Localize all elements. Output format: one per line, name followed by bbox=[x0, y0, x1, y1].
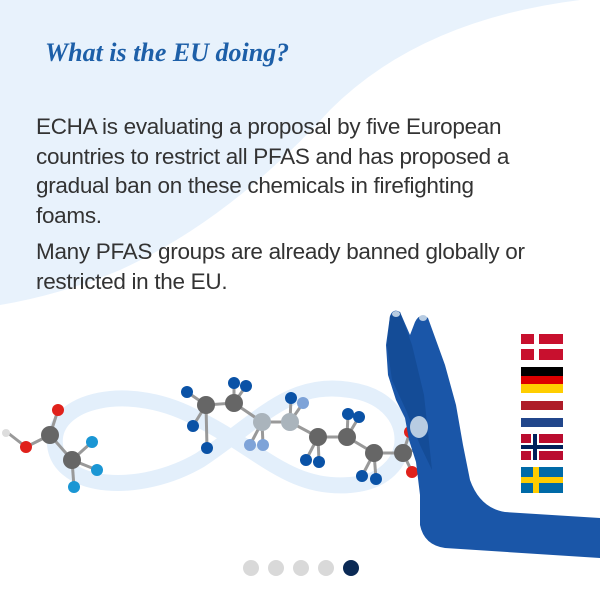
text block: ECHA paragraph: countries to restrict all PFAS and has proposed a bbox=[36, 144, 509, 168]
infinity symbol bbox=[55, 388, 403, 485]
text block: ECHA paragraph: foams. bbox=[36, 202, 102, 228]
text block: bans paragraph bbox=[36, 239, 525, 294]
hand bbox=[386, 311, 600, 558]
text block: bans paragraph: Many PFAS groups are already banned globally or bbox=[36, 239, 525, 264]
molecule chain bbox=[187, 383, 415, 479]
molecule left bbox=[8, 410, 97, 487]
text block: ECHA paragraph: ECHA is evaluating a proposal by five European bbox=[36, 114, 501, 139]
pagination dots bbox=[243, 560, 359, 576]
text block: ECHA paragraph bbox=[36, 114, 510, 228]
title: What is the EU doing? bbox=[45, 38, 289, 67]
text block: ECHA paragraph: gradual ban on these chemicals in firefighting bbox=[36, 173, 474, 198]
text block: bans paragraph: restricted in the EU. bbox=[36, 268, 227, 294]
flags bbox=[521, 334, 563, 493]
